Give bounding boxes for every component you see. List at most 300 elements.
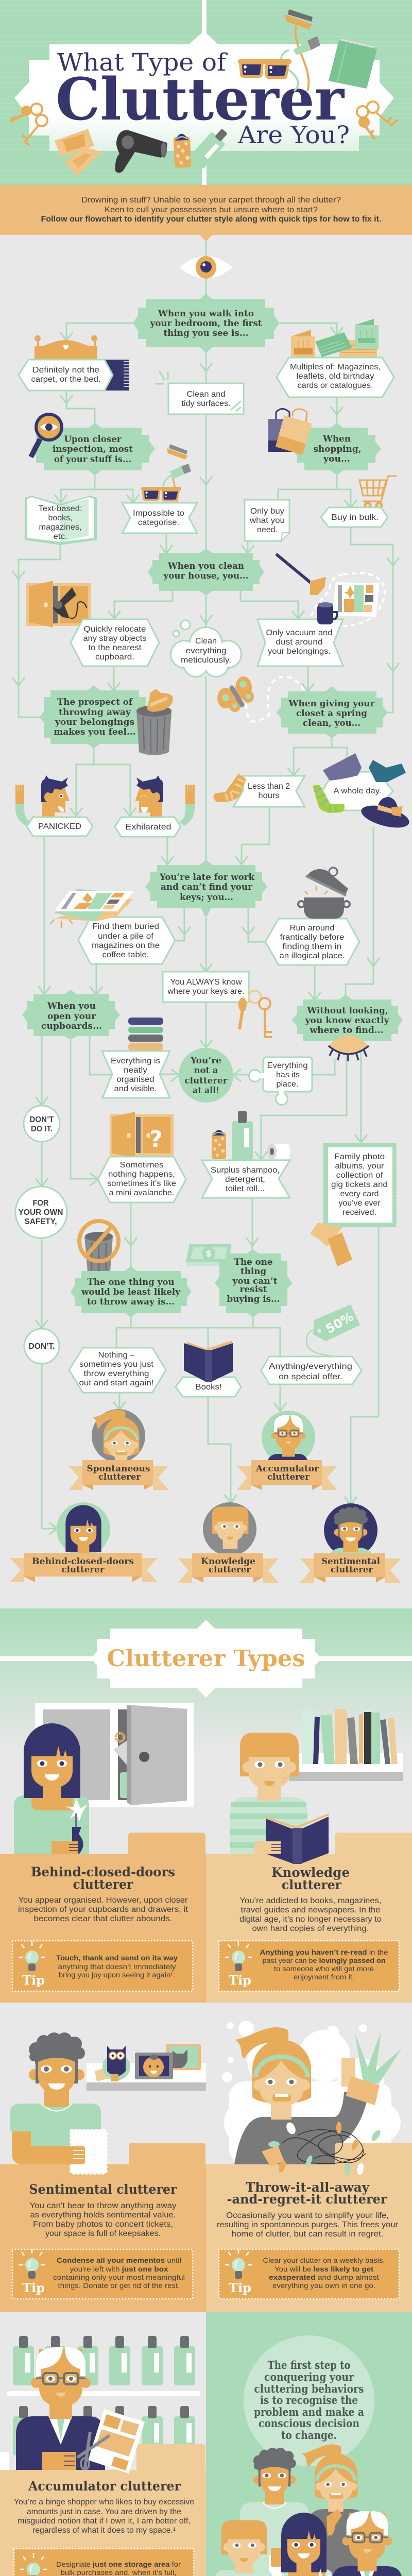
box: clean and tidy surfaces [155,371,244,414]
box: everything neatly organised [102,1051,170,1098]
box: sometimes nothing happens [98,1157,186,1202]
box: multiples of: leaflets, old birthday [297,372,374,381]
portrait: sentimental clutterer [300,1503,401,1583]
icon: banknotes [186,1244,231,1266]
box: text-based book [25,496,97,545]
box: family photo albums: collection of [336,1171,383,1180]
group of five clutterers [214,2445,402,2576]
box: sometimes nothing happens: sometimes it’s like [107,1179,176,1188]
illustration: bubbles and spontaneous woman [222,2021,402,2164]
box: nothing start again: throw everything [83,1369,149,1378]
box: anything on special offer: on special offer. [279,1372,342,1381]
panel: knowledge clutterer: clutterer [282,1877,342,1892]
box: text-based book: etc. [54,532,67,541]
portrait: behind-closed-doors clutterer: Behind-closed-doors [32,1556,134,1567]
box: multiples of: cards or catalogues. [298,381,373,390]
icon: no-bin sign [79,1221,118,1274]
question: when shopping: shopping, [313,444,362,454]
oval: don't do it: DON’T [30,1115,54,1124]
result: not a clutterer: not a [194,1065,218,1076]
box: run around [265,919,359,965]
tip box: Designate just one storage area for [56,2560,181,2568]
box: anything on special offer: Anything/everything [269,1362,352,1371]
box: text-based book: books, [48,514,72,522]
speech bubble: to change. [281,2429,337,2442]
figure: behind-closed-doors girl [14,1723,89,1854]
portrait: spontaneous clutterer: Spontaneous [87,1464,150,1474]
box: sometimes nothing happens: Sometimes [119,1161,164,1170]
icon: 50% tag [306,1304,360,1356]
box: find them buried [78,917,175,964]
portrait: spontaneous clutterer [68,1409,168,1490]
question: upon closer inspection: inspection, most [53,444,133,454]
title text [56,48,350,149]
question: least likely to throw away [71,1266,192,1317]
question: least likely to throw away: to throw away is... [87,1297,175,1307]
icon: folded clothes stack [128,1018,163,1050]
box: run around: Run around [289,924,335,933]
panel: sentimental clutterer: You can't bear to throw anything away [30,2201,177,2210]
box: find them buried: under a pile of [98,932,154,941]
box: quickly relocate: to the nearest [89,643,142,652]
oval: for your own safety: YOUR OWN [19,1208,63,1217]
icon: gig tickets [310,1223,352,1266]
icon: shopping bags [268,409,312,455]
question: late for work: keys; you... [180,892,233,903]
tip box [12,1941,193,1991]
box: only buy what you need: need. [257,526,278,534]
question: open your cupboards: cupboards... [41,1021,102,1031]
icon: butterfly with dashed trail [217,676,304,722]
illustration: cupboard [35,1703,194,1807]
oval: don't [24,1329,59,1364]
box: only vacuum: dust around [276,638,322,647]
tip box: to someone who will get more [274,1964,374,1973]
box: books: Books! [196,1383,221,1392]
box: quickly relocate: any stray objects [83,634,147,643]
icon: panicked man [15,775,70,826]
icon: green book [329,39,377,89]
icon: keys [238,991,272,1037]
box: puzzle piece everything has its place [248,1056,313,1106]
question: can't resist buying: The one [234,1257,273,1267]
tip box: enjoyment from it. [294,1973,354,1981]
panel: accumulator clutterer: Accumulator clutterer [28,2479,181,2494]
icon: hair dryer [115,130,167,173]
box: books [176,1377,241,1397]
panel: first step callout [206,2312,412,2576]
question: first thing you see [133,293,280,353]
box: nothing start again: Nothing – [98,1351,135,1360]
cloud: clean everything: everything [185,647,227,655]
icon: cupboard with question mark [110,1112,174,1158]
oval: don't do it [24,1106,60,1142]
open book and hand [254,1814,329,1864]
portrait: sentimental clutterer: clutterer [331,1565,373,1575]
cloud: clean everything [171,620,241,676]
box: only vacuum [258,619,343,666]
tip box: containing only your most meaningful [53,2273,185,2281]
speech bubble: problem and make a [254,2405,364,2418]
icon: shopping cart [359,476,397,508]
panel: sentimental clutterer: your space is full of keepsakes. [45,2229,161,2238]
box: find them buried: coffee table. [102,951,149,959]
question: late for work [145,860,267,918]
box: puzzle piece everything has its place: place. [276,1080,299,1089]
box: you always know [163,972,249,1002]
question: first thing you see: When you walk into [158,309,254,319]
icon: bed headboard [35,335,97,359]
icon: closed eye [329,1036,369,1061]
box: exhilarated: Exhilarated [126,823,171,832]
box: puzzle piece everything has its place: has its [276,1071,300,1079]
box: family photo albums: Family photo [334,1153,385,1161]
box: everything neatly organised: organised [116,1075,154,1084]
panel: sentimental clutterer: Sentimental clutterer [29,2182,177,2197]
result: not a clutterer [179,1048,233,1103]
panel: throw-it-all-away clutterer: Occasionally you want to simplify your life, [226,2211,389,2220]
figure: sentimental man [10,2032,101,2164]
question: spring clean: When giving your [288,699,375,709]
box: impossible to categorise [122,503,197,533]
panel: knowledge clutterer: travel guides and newspapers. In the [241,1906,380,1914]
box: family photo albums: every card [340,1190,379,1198]
box: text-based book: Text-based: [38,504,82,513]
box: less than 2 hours: Less than 2 [248,782,290,791]
panel: throw-it-all-away clutterer: Throw-it-all-away [246,2180,370,2195]
box: family photo albums: albums, your [335,1162,384,1171]
box: everything neatly organised: and visible. [114,1084,157,1093]
icon: orange sock [213,774,246,802]
box: impossible to categorise: categorise. [138,518,179,527]
panel: knowledge clutterer: Knowledge [271,1865,350,1880]
box: clean and tidy surfaces: tidy surfaces. [181,399,231,408]
icon: right keys [357,101,398,139]
title text: Are You? [237,121,350,149]
icon: cable and glasses [141,444,191,518]
panel: knowledge clutterer: You’re addicted to books, magazines, [240,1896,381,1905]
tangled fairy lights [262,2121,382,2176]
box: exhilarated [115,817,181,837]
panel: knowledge clutterer: digital age, it’s no longer necessary to [239,1915,382,1924]
panel: behind-closed-doors clutterer [0,1833,206,2003]
panel: throw-it-all-away clutterer [206,2121,412,2312]
panel: throw-it-all-away clutterer: resulting in spontaneous purges. This frees your [217,2221,398,2229]
panel: accumulator clutterer: amounts just in case. You are driven by the [27,2507,181,2516]
panel: behind-closed-doors clutterer: clutterer [73,1877,133,1892]
icon: green sock [313,785,345,813]
box: less than 2 hours: hours [259,791,280,800]
box: a whole day [322,772,393,810]
result: not a clutterer: at all! [193,1086,219,1096]
icon: cupboard with question mark: ? [149,1126,163,1153]
tip box [219,2249,399,2299]
box: buy in bulk: Buy in bulk. [331,513,379,522]
portrait: accumulator clutterer: Accumulator [255,1464,319,1474]
oval: for your own safety: FOR [33,1199,48,1208]
portrait: behind-closed-doors clutterer: clutterer [62,1565,105,1575]
portrait: accumulator clutterer [237,1411,337,1490]
question: open your cupboards: open your [47,1011,96,1022]
question: late for work: You’re late for work [159,872,255,883]
question: when shopping: When [322,434,351,444]
panel: throw-it-all-away clutterer: -and-regret-it clutterer [227,2192,387,2207]
tip box: Clear your clutter on a weekly basis. [263,2256,385,2264]
panel: accumulator clutterer [0,2409,206,2576]
box: not the carpet: carpet, or the bed. [31,375,101,384]
icon: magazine, duster and mug [277,555,385,626]
box: quickly relocate: Quickly relocate [83,625,146,634]
heading plaque: clutterer types: Clutterer Types [107,1646,305,1672]
speech bubble [244,2335,374,2466]
icon: cupboard with hair dryer [26,581,91,628]
box: family photo albums [323,1143,397,1227]
box: everything neatly organised: Everything is [111,1057,160,1065]
icon: glasses [238,59,291,79]
box: only vacuum: your belongings. [268,647,331,656]
tip box: Anything you haven’t re-read in the [260,1948,388,1956]
box: nothing start again [69,1348,166,1393]
tip box: Tip [22,1973,45,1988]
heading plaque: clutterer types [91,1620,322,1698]
box: surplus shampoo: Surplus shampoo, [211,1166,280,1175]
question: upon closer inspection: of your stuff is... [54,454,131,465]
question: throwing away: makes you feel... [54,727,136,737]
icon: 50% tag: 50% [323,1309,356,1336]
tip box: bring you joy upon seeing it again¹. [59,1971,175,1979]
box: you always know: where your keys are. [167,987,244,996]
box: multiples of [277,358,394,397]
tip box: Tip [22,2280,45,2295]
scrapbook and hand [62,2131,106,2173]
icon: bin with hat [136,689,173,755]
question: when shopping: you... [323,454,350,464]
box: run around: frantically before [280,933,344,942]
tip box: Condense all your mementos until [57,2256,181,2264]
box: only vacuum: Only vacuum and [266,629,333,637]
panel: behind-closed-doors clutterer: inspection of your cupboards and drawers, it [18,1905,188,1914]
question: open your cupboards: When you [47,1001,96,1011]
portrait: knowledge clutterer: Knowledge [201,1556,255,1567]
speech bubble: conquering your [264,2370,354,2383]
question: spring clean [277,686,388,738]
question: when you clean [148,549,264,596]
intro text: Keen to cull your possessions but unsure where to start? [105,206,318,214]
question: without looking: you know exactly [304,1015,390,1026]
box: family photo albums: you’ve ever [339,1199,380,1208]
box: text-based book: magazines, [39,523,81,532]
title text: What Type of [57,48,228,77]
tip box: Tip [229,1973,251,1988]
box: sometimes nothing happens: nothing happens, [108,1170,175,1179]
box: nothing start again: sometimes you just [79,1360,154,1369]
portrait: accumulator clutterer: clutterer [267,1472,310,1482]
box: only buy what you need [245,500,289,541]
question: can't resist buying: buying is... [227,1294,280,1304]
box: surplus shampoo: toilet roll... [226,1184,265,1193]
question: can't resist buying: resist [240,1284,267,1295]
flowchart connector lines [19,241,393,1529]
header background [0,0,412,185]
panel: accumulator clutterer: misguided notion that if I own it, I am better off, [18,2517,191,2526]
tip box [14,2549,194,2576]
panel: knowledge clutterer: own hard copies of everything. [252,1924,369,1933]
icon: tilted bottle [189,125,232,170]
icon: pot with lid [298,868,350,919]
box: anything on special offer [261,1357,362,1384]
tip box: everything you own in one go. [272,2281,375,2290]
box: family photo albums: received. [342,1208,376,1217]
box: clean and tidy surfaces: Clean and [186,390,226,399]
icon: magazine pile [50,889,134,928]
box: family photo albums: gig tickets and [331,1180,388,1189]
box: buy in bulk [321,507,388,527]
question: without looking: where to find... [309,1025,383,1036]
box: sometimes nothing happens: a mini avalanche. [109,1189,174,1197]
icon: open navy book [184,1341,233,1382]
intro band [0,185,412,242]
tip box: you're left with just one box [70,2265,168,2273]
box: find them buried: magazines on the [92,941,160,950]
box: not the carpet [19,360,129,391]
tip box: Tip [229,2280,251,2295]
box: surplus shampoo [202,1160,290,1198]
panel: behind-closed-doors clutterer: Behind-closed-doors [31,1865,175,1879]
question: when you clean: your house, you... [163,571,248,581]
box: you always know: You ALWAYS know [170,978,242,987]
question: upon closer inspection: Upon closer [64,434,122,445]
box: a whole day: A whole day. [334,787,381,795]
cloud: clean everything: meticulously. [181,656,231,665]
tip box: things. Donate or get rid of the rest. [58,2281,180,2290]
panel: accumulator clutterer: regardless of what it does to my space.¹ [32,2526,176,2535]
icon: eye start [180,256,232,279]
box: quickly relocate: cupboard. [95,653,134,662]
question: throwing away: The prospect of [57,697,133,707]
box: impossible to categorise: Impossible to [133,509,184,518]
illustration: bookshelf [289,1709,403,1781]
question: can't resist buying [215,1249,293,1317]
question: can't resist buying: you can’t [232,1276,278,1286]
icon: cables [281,9,320,91]
speech bubble: The first step to [268,2359,350,2371]
question: throwing away: throwing away [59,707,131,718]
question: spring clean: closet a spring [296,708,367,719]
portrait: knowledge clutterer: clutterer [209,1565,251,1575]
question: when shopping [291,423,381,476]
question: late for work: and can’t find your [161,882,253,892]
box: run around: finding them in [282,942,342,951]
portrait: spontaneous clutterer: clutterer [98,1472,141,1482]
icon: shampoo, deodorant and toilet roll [212,1111,290,1160]
icon: tickets [55,129,102,176]
icon: deodorant stick [173,133,192,168]
question: can't resist buying: thing [241,1266,266,1277]
question: spring clean: clean, you... [303,718,360,728]
question: open your cupboards [22,990,120,1040]
cloud: clean everything: Clean [195,637,217,646]
panel: sentimental clutterer [0,2131,206,2312]
oval: don't do it: DO IT. [31,1125,53,1133]
box: nothing start again: out and start again! [79,1379,153,1387]
tip box: Touch, thank and send on its way [56,1954,178,1962]
question: without looking: Without looking, [307,1006,388,1016]
tip box [12,2249,193,2299]
speech bubble: is to recognise the [260,2394,358,2406]
intro text: Drowning in stuff? Unable to see your carpet through all the clutter? [81,196,341,205]
hand, scissors and coupon [42,2409,145,2473]
panel: sentimental clutterer: as everything holds sentimental value. [30,2211,176,2219]
tip box: anything that doesn’t immediately [58,1962,176,1971]
question: least likely to throw away: would be least likely [81,1287,181,1297]
box: multiples of: Multiples of: Magazines, [290,363,381,371]
box: surplus shampoo: detergent, [225,1175,265,1184]
hand and vase [52,1841,80,1854]
box: panicked [27,817,93,836]
oval: don't: DON’T. [29,1342,55,1351]
portrait: knowledge clutterer [178,1502,279,1583]
box: find them buried: Find them buried [92,922,159,931]
panel: sentimental clutterer: From baby photos to concert tickets, [33,2220,173,2229]
box: panicked: PANICKED [38,822,81,831]
question: least likely to throw away: The one thing you [88,1277,174,1287]
box: puzzle piece everything has its place: Everything [267,1061,308,1070]
section background: clutterer types [0,1608,412,1753]
speech bubble: cluttering behaviors [254,2382,364,2395]
question: when you clean: When you clean [167,561,244,571]
box: less than 2 hours [233,776,305,807]
illustration: keepsake shelf [87,2044,206,2091]
title text: Clutterer [56,66,345,133]
question: upon closer inspection [31,423,155,476]
icon: left keys [10,104,47,145]
question: throwing away [40,685,151,749]
figure: accumulator man [16,2347,105,2470]
figure: knowledge boy [230,1733,307,1854]
box: run around: an illogical place. [279,952,345,960]
panel: accumulator clutterer: You’re a binge shopper who likes to buy excessive [14,2498,194,2506]
intro text: Follow our flowchart to identify your clutter style along with quick tips for how to fix it. [41,215,381,224]
icon: exhilarated man [135,775,195,826]
portrait: sentimental clutterer: Sentimental [321,1556,381,1567]
box: quickly relocate [71,619,159,666]
panel: behind-closed-doors clutterer: becomes clear that clutter abounds. [34,1914,172,1923]
icon: shoes [323,753,406,782]
result: not a clutterer: You’re [190,1056,221,1066]
intro text [41,196,381,224]
tip box: exasperated and dump almost [269,2273,379,2281]
question: first thing you see: your bedroom, the first [150,318,262,329]
box: only buy what you need: what you [249,516,285,525]
oval: for your own safety [15,1187,67,1238]
icon: navy hat [359,797,411,832]
oval: for your own safety: SAFETY, [25,1217,57,1226]
tip box: past year can be lovingly passed on [263,1956,385,1964]
portrait: behind-closed-doors clutterer [10,1502,158,1582]
box: everything neatly organised: neatly [124,1066,147,1075]
panel: behind-closed-doors clutterer: You appear organised. However, upon closer [19,1896,187,1905]
question: throwing away: your belongings [55,717,134,727]
speech bubble: conscious decision [259,2417,359,2430]
question: without looking [291,994,403,1046]
question: first thing you see: thing you see is... [164,328,248,338]
icon: banknotes: $ [206,1249,211,1259]
box: not the carpet: Definitely not the [32,366,99,375]
title plaque [14,31,394,151]
tip box: You will be less likely to get [274,2265,373,2273]
flowchart arrowheads [12,327,399,1535]
icon: cards, newspaper and catalogues [291,319,379,357]
